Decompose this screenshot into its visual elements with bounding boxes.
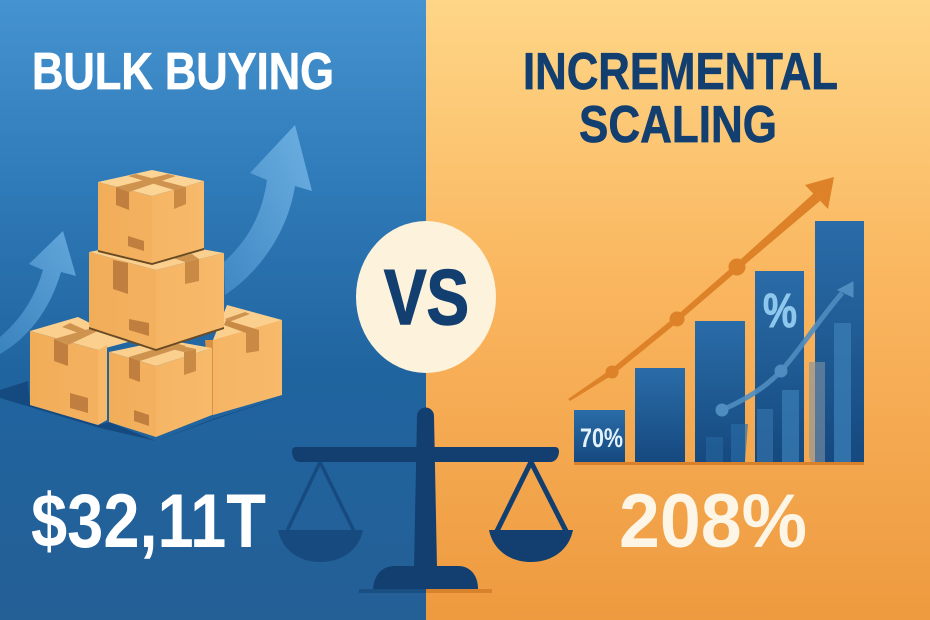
panel: incremental scaling background bbox=[426, 0, 930, 620]
box: middle bbox=[89, 240, 224, 351]
scale post bbox=[414, 408, 437, 568]
heading: incremental scaling: INCREMENTAL bbox=[523, 43, 838, 101]
bar 3 bbox=[695, 321, 745, 462]
bar 2 bbox=[635, 368, 685, 462]
box: bottom front bbox=[109, 340, 212, 437]
box: top bbox=[98, 170, 204, 265]
badge: VS bbox=[356, 221, 496, 373]
scale beam bbox=[292, 447, 559, 462]
icon: balance scale bbox=[278, 408, 573, 593]
panel: bulk buying background bbox=[0, 0, 426, 620]
bar 1 bbox=[574, 410, 625, 462]
icon: blue trend arrow bbox=[716, 282, 853, 416]
scale ground shadow bbox=[359, 589, 492, 593]
right pan bbox=[489, 462, 573, 562]
icon: small growth arrow bbox=[0, 231, 76, 354]
icon: stacked cardboard boxes bbox=[0, 170, 282, 441]
badge: VS: VS bbox=[384, 253, 469, 341]
box shadow bbox=[0, 381, 282, 441]
bar chart: growth bars bbox=[574, 221, 864, 465]
left pan bbox=[278, 462, 363, 562]
inner bars bbox=[706, 323, 851, 462]
chart baseline bbox=[574, 462, 864, 465]
icon: large growth arrow bbox=[224, 125, 312, 295]
stat: bulk buying value: $32,11T bbox=[31, 479, 266, 564]
icon: orange trend arrow bbox=[568, 177, 834, 401]
heading: incremental scaling bbox=[523, 43, 838, 154]
stat: incremental scaling value: 208% bbox=[619, 479, 807, 564]
scale base bbox=[373, 566, 478, 589]
bar 5 bbox=[815, 221, 864, 462]
label: 70%: 70% bbox=[580, 423, 623, 453]
label: percent sign: % bbox=[763, 285, 797, 338]
box: bottom left bbox=[30, 317, 128, 425]
box: back right bbox=[205, 305, 282, 415]
heading: incremental scaling: SCALING bbox=[579, 96, 777, 154]
heading: bulk buying: BULK BUYING bbox=[32, 43, 334, 101]
bar 4 bbox=[755, 271, 804, 462]
